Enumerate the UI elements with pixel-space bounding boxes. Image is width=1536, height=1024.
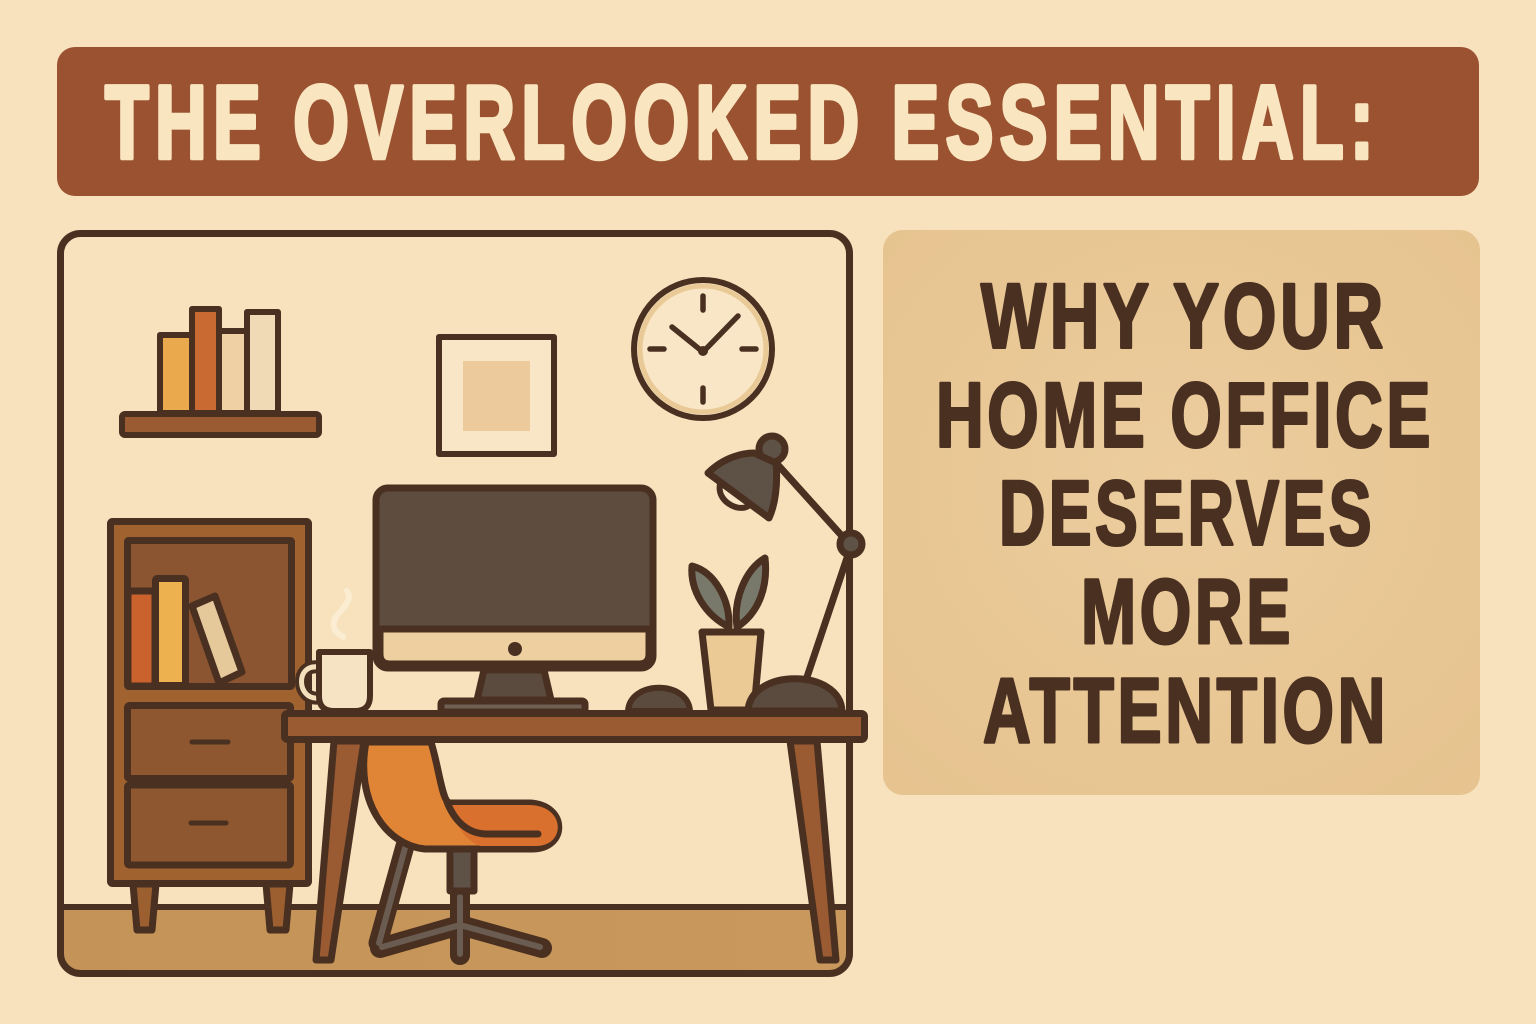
icon: wall clock (634, 280, 772, 418)
potted plant (692, 558, 766, 710)
floor (61, 907, 849, 974)
panel: subtitle (883, 230, 1480, 795)
office chair (364, 742, 559, 955)
bookcase (110, 522, 308, 930)
subtitle text (936, 266, 1434, 762)
picture frame (439, 337, 554, 454)
subtitle text: ATTENTION (983, 660, 1389, 762)
subtitle text: WHY YOUR (981, 266, 1387, 368)
desktop monitor (376, 488, 653, 712)
frame (60, 234, 850, 974)
subtitle text: MORE (1081, 561, 1294, 663)
panel: home office illustration (60, 234, 864, 974)
desk lamp (708, 436, 862, 711)
wall shelf with books (122, 309, 319, 435)
coffee mug with steam (301, 591, 370, 711)
desk (284, 714, 864, 960)
title banner (57, 47, 1479, 196)
mouse (628, 688, 690, 711)
subtitle text: DESERVES (999, 462, 1375, 564)
